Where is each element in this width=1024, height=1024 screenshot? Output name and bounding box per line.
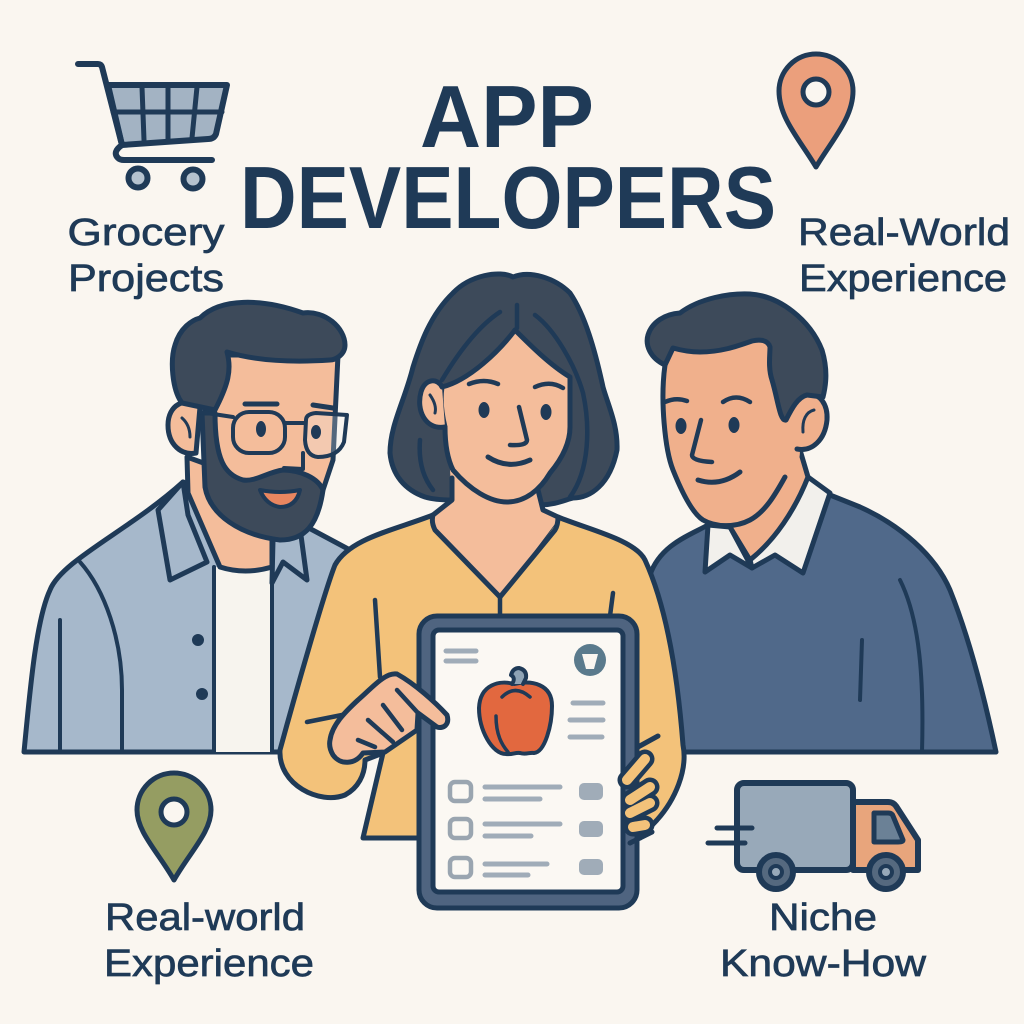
white t-shirt	[214, 567, 272, 752]
neck	[187, 457, 272, 571]
label: real-world experience bottom: Real-world	[105, 897, 305, 939]
head	[663, 340, 815, 526]
eyes	[676, 418, 686, 434]
icon: delivery truck	[708, 783, 918, 889]
head	[441, 330, 570, 502]
collar	[158, 482, 207, 580]
neck	[433, 470, 558, 597]
ear	[168, 402, 200, 453]
label: real-world experience top: Real-World	[798, 212, 1010, 254]
label: niche know-how: Niche	[769, 897, 877, 939]
tablet list rows	[450, 782, 603, 877]
nose	[692, 420, 712, 462]
jacket	[24, 482, 350, 752]
hair strands	[420, 315, 587, 497]
neck	[730, 445, 808, 560]
label: grocery projects	[68, 212, 224, 300]
smile	[488, 457, 530, 464]
person: woman with tablet	[280, 274, 684, 838]
title: APP	[420, 67, 594, 166]
hand: pointing	[307, 674, 448, 762]
shirt collar right	[750, 477, 830, 573]
ear	[420, 381, 445, 427]
beard	[202, 413, 323, 540]
label: real-world experience bottom	[104, 897, 314, 985]
label: grocery projects: Projects	[68, 258, 224, 300]
jacket details	[60, 562, 122, 752]
brows	[245, 404, 333, 408]
sweater details	[860, 580, 922, 752]
hand: holding tablet	[627, 736, 658, 843]
title	[240, 67, 776, 247]
icon: bell pepper	[479, 668, 552, 754]
smile	[698, 472, 740, 482]
hair back	[390, 274, 617, 505]
hair	[172, 302, 345, 410]
label: real-world experience bottom: Experience	[104, 943, 314, 985]
neck lines	[730, 450, 808, 560]
person: man in blue sweater	[647, 294, 996, 752]
head	[205, 355, 338, 520]
tablet	[419, 616, 637, 908]
title: DEVELOPERS	[240, 148, 776, 247]
shirt collar left	[705, 525, 752, 572]
glasses	[200, 412, 347, 457]
icon: orange location pin	[779, 54, 853, 167]
blouse	[280, 515, 684, 838]
label: niche know-how: Know-How	[720, 943, 927, 985]
icon: green location pin	[137, 773, 211, 880]
tablet menu lines	[446, 651, 603, 737]
nose	[510, 407, 527, 445]
brows	[469, 381, 563, 388]
brows	[665, 398, 750, 402]
label: real-world experience top: Experience	[799, 258, 1007, 300]
label: grocery projects: Grocery	[68, 212, 224, 254]
tablet cart badge	[574, 644, 606, 676]
label: niche know-how	[720, 897, 927, 985]
icon: shopping cart	[78, 64, 227, 188]
hair	[647, 294, 826, 420]
label: real-world experience top	[798, 212, 1010, 300]
blouse seams	[375, 593, 613, 677]
mouth	[260, 490, 300, 507]
hair part	[442, 305, 517, 380]
person: bearded man	[24, 302, 350, 752]
eyes	[478, 402, 490, 418]
sweater	[650, 495, 996, 752]
nose	[284, 453, 303, 469]
ear	[797, 395, 827, 449]
